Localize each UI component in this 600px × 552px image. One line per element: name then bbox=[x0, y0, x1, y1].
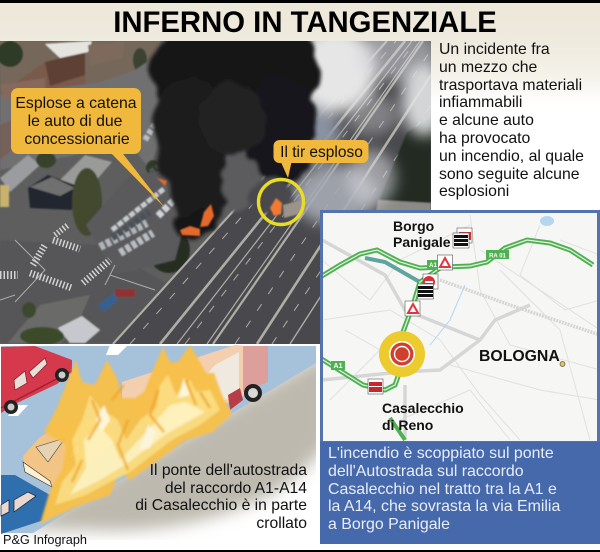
callout: concessionarie: Esplose a catena bbox=[15, 95, 137, 112]
motorway bbox=[320, 240, 593, 440]
red car bbox=[1, 346, 72, 414]
intro text: un incendio, al quale bbox=[439, 148, 584, 165]
river bbox=[430, 285, 465, 345]
place labels: Borgo bbox=[393, 218, 434, 234]
callout: il tir esploso bbox=[256, 140, 368, 226]
place labels: Casalecchio bbox=[382, 400, 464, 416]
black smoke column bbox=[149, 17, 321, 239]
intro text bbox=[439, 41, 584, 200]
light smoke bbox=[293, 28, 446, 225]
blue caption box bbox=[320, 442, 600, 544]
highway bbox=[113, 41, 431, 344]
blue caption box: L'incendio è scoppiato sul ponte bbox=[328, 445, 554, 462]
bridge deck shadow bbox=[20, 350, 330, 531]
map panel bbox=[320, 210, 600, 442]
grey main roads bbox=[322, 240, 600, 440]
blue caption box: Casalecchio nel tratto tra la A1 e bbox=[328, 481, 557, 498]
road labels: RA 01 bbox=[489, 254, 507, 260]
blue car bbox=[1, 475, 50, 534]
flames bbox=[40, 345, 232, 524]
highlight ring bbox=[258, 180, 304, 224]
yellow car bbox=[23, 415, 115, 487]
aerial photo of the fire bbox=[0, 41, 431, 344]
intro text: infiammabili bbox=[439, 94, 522, 111]
bridge caption: di Casalecchio è in parte bbox=[135, 497, 307, 514]
callout: concessionarie: concessionarie bbox=[24, 131, 130, 148]
incident marker bbox=[379, 331, 425, 377]
road labels bbox=[331, 250, 509, 370]
intro text: Un incidente fra bbox=[439, 41, 550, 58]
callout: concessionarie: le auto di due bbox=[28, 113, 123, 130]
title: INFERNO IN TANGENZIALE bbox=[113, 6, 497, 39]
parked cars bbox=[100, 100, 190, 253]
credit: P&G Infograph bbox=[3, 533, 87, 547]
road labels: A1 bbox=[334, 363, 343, 370]
blue caption box: a Borgo Panigale bbox=[328, 516, 450, 533]
header band bbox=[0, 0, 600, 105]
place labels: BOLOGNA bbox=[479, 348, 560, 365]
place labels: di Reno bbox=[382, 417, 433, 433]
top rule bbox=[0, 0, 600, 3]
bridge caption: del raccordo A1-A14 bbox=[165, 480, 307, 497]
intro text: e alcune auto bbox=[439, 112, 534, 129]
bottom rule bbox=[0, 550, 600, 552]
blue caption box: dell'Autostrada sul raccordo bbox=[328, 463, 524, 480]
blue caption box: la A14, che sovrasta la via Emilia bbox=[328, 498, 560, 515]
road labels: A1 bbox=[429, 263, 437, 269]
bridge caption: crollato bbox=[256, 515, 307, 532]
illustration: burning vehicles on the bridge bbox=[0, 344, 316, 540]
intro text: sono seguite alcune bbox=[439, 166, 580, 183]
bridge caption: Il ponte dell'autostrada bbox=[150, 462, 307, 479]
intro text: trasportava materiali bbox=[439, 77, 582, 94]
callout: concessionarie bbox=[11, 88, 165, 208]
place labels bbox=[382, 218, 560, 433]
intro text: esplosioni bbox=[439, 183, 509, 200]
place labels: Panigale bbox=[393, 234, 451, 250]
traffic signs bbox=[368, 228, 472, 394]
intro text: ha provocato bbox=[439, 130, 530, 147]
city marker bbox=[560, 362, 565, 366]
intro text: un mezzo che bbox=[439, 59, 537, 76]
dark trees on the right bbox=[375, 118, 431, 212]
callout: il tir esploso: Il tir esploso bbox=[280, 144, 363, 161]
minor roads bbox=[322, 215, 600, 440]
truck bbox=[122, 345, 268, 436]
flames bbox=[157, 178, 282, 236]
